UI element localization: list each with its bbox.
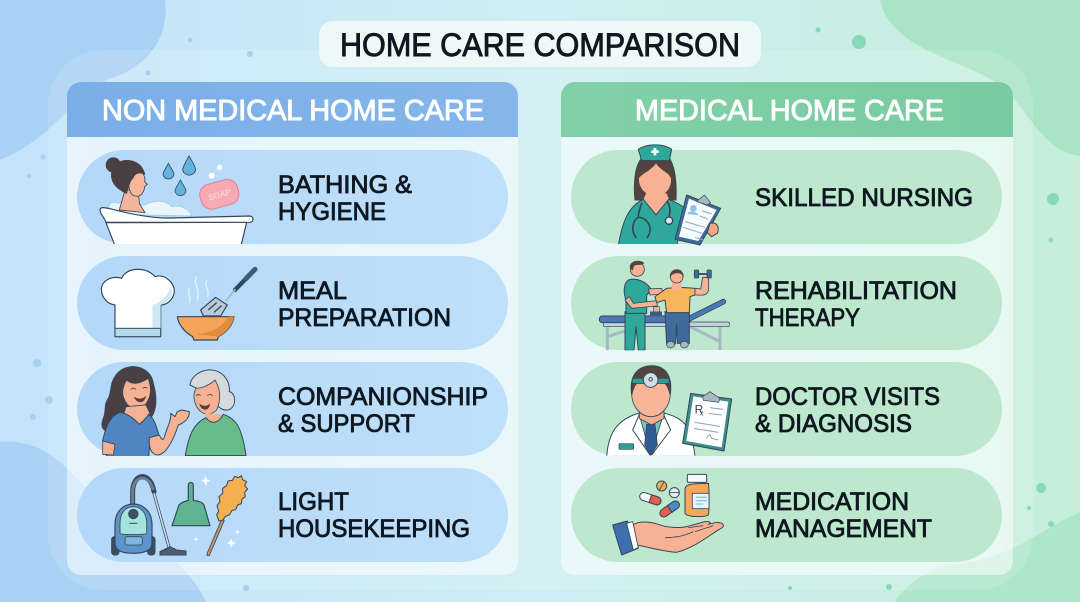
item: companionship and support: & SUPPORT: [278, 410, 415, 438]
item: bathing and hygiene: BATHING &: [278, 171, 412, 199]
icon: hand with pills and bottle: [613, 474, 723, 555]
item: meal preparation: MEAL: [278, 277, 347, 305]
item: rehabilitation therapy: THERAPY: [755, 304, 860, 332]
item: medication management: MEDICATION: [755, 488, 909, 516]
item: companionship and support: COMPANIONSHIP: [278, 383, 488, 411]
heading: non medical home care: [67, 82, 518, 137]
icon: chef hat and mixing bowl: [101, 269, 255, 340]
icon: doctor with prescription clipboard: [607, 366, 732, 457]
heading: non medical home care: NON MEDICAL HOME CARE: [102, 95, 484, 127]
item: light housekeeping: LIGHT: [278, 488, 349, 516]
item: rehabilitation therapy: [571, 256, 1002, 350]
item: light housekeeping: [77, 468, 508, 562]
icon: doctor with prescription clipboard: x: [700, 409, 704, 418]
icon: nurse with clipboard: [618, 145, 721, 245]
item: companionship and support: [77, 362, 508, 462]
item: rehabilitation therapy: REHABILITATION: [755, 277, 957, 305]
item: skilled nursing: [571, 145, 1002, 245]
item: doctor visits and diagnosis: [571, 362, 1002, 457]
icon: woman bathing with soap: SOAP: [207, 187, 232, 202]
item: bathing and hygiene: HYGIENE: [278, 198, 386, 226]
item: meal preparation: [77, 256, 508, 350]
item: skilled nursing: SKILLED NURSING: [755, 184, 973, 212]
item: doctor visits and diagnosis: & DIAGNOSIS: [755, 410, 912, 438]
title: HOME CARE COMPARISON: [340, 27, 740, 63]
heading: medical home care: MEDICAL HOME CARE: [635, 95, 944, 127]
item: medication management: MANAGEMENT: [755, 515, 932, 543]
item: medication management: [571, 468, 1002, 562]
item: bathing and hygiene: [77, 150, 508, 250]
item: light housekeeping: HOUSEKEEPING: [278, 515, 470, 543]
panel: medical home care: [561, 82, 1013, 575]
item: meal preparation: PREPARATION: [278, 304, 451, 332]
icon: doctor with prescription clipboard: R: [695, 402, 704, 416]
icon: caregiver and senior laughing: [102, 367, 246, 462]
icon: woman bathing with soap: [100, 156, 253, 250]
panel: non medical home care: [67, 82, 518, 575]
heading: medical home care: [561, 82, 1013, 137]
item: doctor visits and diagnosis: DOCTOR VISITS: [755, 383, 940, 411]
icon: physiotherapist with patient: [599, 261, 729, 350]
icon: vacuum, dustpan and duster: [112, 476, 248, 555]
